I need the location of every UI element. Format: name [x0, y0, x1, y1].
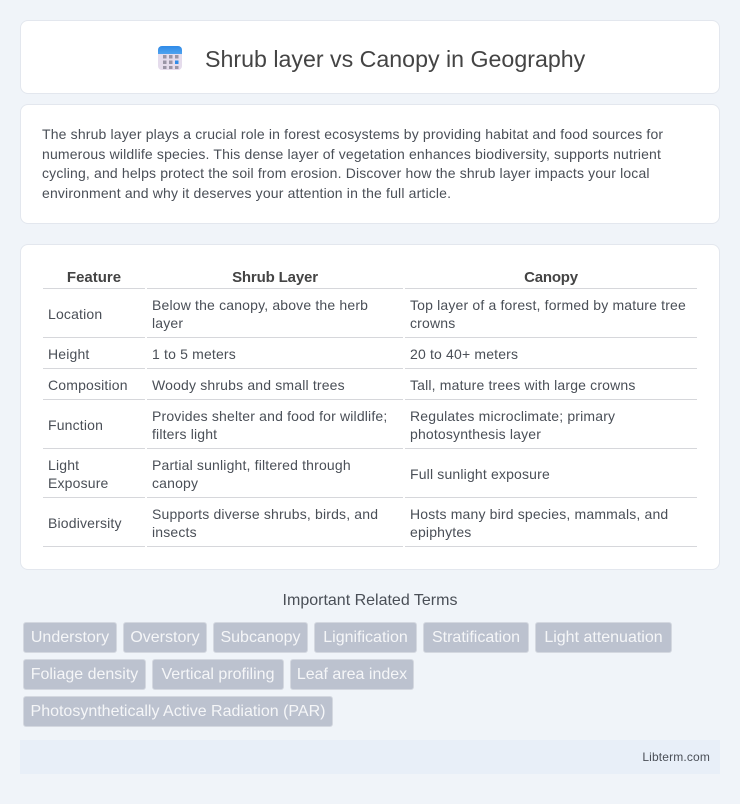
- row: Location: crowns: [410, 315, 455, 331]
- row: Height: [48, 346, 518, 362]
- row: Function: [48, 408, 615, 442]
- row: Function: Provides shelter and food for wildlife;: [152, 408, 387, 424]
- tag: Light attenuation: Light attenuation: [544, 629, 663, 646]
- tag: Subcanopy: Subcanopy: [220, 629, 301, 646]
- row: Function: Regulates microclimate; primary: [410, 408, 615, 424]
- tag: Leaf area index: [290, 659, 414, 690]
- row: Composition: Tall, mature trees with large crowns: [410, 377, 636, 393]
- row: Biodiversity: Supports diverse shrubs, birds, and: [152, 506, 378, 522]
- tag: Vertical profiling: Vertical profiling: [162, 666, 274, 683]
- tag: Lignification: Lignification: [323, 629, 408, 646]
- tag: Lignification: [314, 622, 417, 653]
- header card: [20, 20, 720, 94]
- table header: Feature: Feature: [67, 269, 121, 286]
- row: Function: photosynthesis layer: [410, 426, 541, 442]
- intro text: environment and why it deserves your attention in the full article.: [42, 185, 451, 201]
- tag: Overstory: Overstory: [130, 629, 200, 646]
- tag: Photosynthetically Active Radiation (PAR): [23, 696, 333, 727]
- row: Biodiversity: [48, 506, 668, 540]
- tag: Leaf area index: Leaf area index: [297, 666, 407, 683]
- row: Height: 1 to 5 meters: [152, 346, 236, 362]
- row: Light Exposure: canopy: [152, 475, 198, 491]
- row: Composition: Composition: [48, 377, 128, 393]
- comparison table panel: [20, 244, 720, 570]
- row: Composition: Woody shrubs and small trees: [152, 377, 345, 393]
- tag: Understory: [23, 622, 117, 653]
- row: Biodiversity: Biodiversity: [48, 515, 122, 531]
- row: Light Exposure: Partial sunlight, filtered through: [152, 457, 351, 473]
- row: Function: filters light: [152, 426, 217, 442]
- footer credit: Libterm.com: [642, 750, 710, 764]
- row: Height: Height: [48, 346, 90, 362]
- row: Light Exposure: Full sunlight exposure: [410, 466, 550, 482]
- row: Location: layer: [152, 315, 183, 331]
- intro text: The shrub layer plays a crucial role in forest ecosystems by providing habitat and food sources for: [42, 126, 663, 142]
- tag: Stratification: [423, 622, 529, 653]
- row: Location: Location: [48, 306, 102, 322]
- tag: Photosynthetically Active Radiation (PAR): Photosynthetically Active Radiation (PAR): [31, 703, 325, 720]
- intro panel: [20, 104, 720, 224]
- tag: Understory: Understory: [31, 629, 109, 646]
- tag: Stratification: Stratification: [432, 629, 520, 646]
- intro text: cycling, and helps protect the soil from erosion. Discover how the shrub layer impacts your local: [42, 165, 650, 181]
- row: Location: [48, 297, 686, 331]
- related terms heading: Important Related Terms: [283, 592, 457, 609]
- tag: Foliage density: Foliage density: [31, 666, 138, 683]
- row: Biodiversity: Hosts many bird species, mammals, and: [410, 506, 668, 522]
- row: Biodiversity: epiphytes: [410, 524, 471, 540]
- table header: Shrub Layer: Shrub Layer: [232, 269, 318, 286]
- footer bar: [20, 740, 720, 774]
- title: Shrub layer vs Canopy in Geography: [205, 46, 585, 72]
- row: Light Exposure: Exposure: [48, 475, 109, 491]
- icon: calendar: [158, 46, 182, 70]
- row: Location: Top layer of a forest, formed by mature tree: [410, 297, 686, 313]
- row: Biodiversity: insects: [152, 524, 197, 540]
- row: Function: Function: [48, 417, 103, 433]
- row: Light Exposure: [48, 457, 550, 491]
- tag: Vertical profiling: [152, 659, 284, 690]
- tag: Foliage density: [23, 659, 146, 690]
- tag: Light attenuation: [535, 622, 672, 653]
- table header: Canopy: Canopy: [524, 269, 578, 286]
- tag: Subcanopy: [213, 622, 308, 653]
- intro text: [42, 126, 663, 201]
- related terms tags: [23, 622, 672, 727]
- row: Height: 20 to 40+ meters: [410, 346, 518, 362]
- intro text: numerous wildlife species. This dense layer of vegetation enhances biodiversity, supports nutrient: [42, 146, 661, 162]
- row: Location: Below the canopy, above the herb: [152, 297, 368, 313]
- row: Composition: [48, 377, 636, 393]
- tag: Overstory: [123, 622, 207, 653]
- row: Light Exposure: Light: [48, 457, 79, 473]
